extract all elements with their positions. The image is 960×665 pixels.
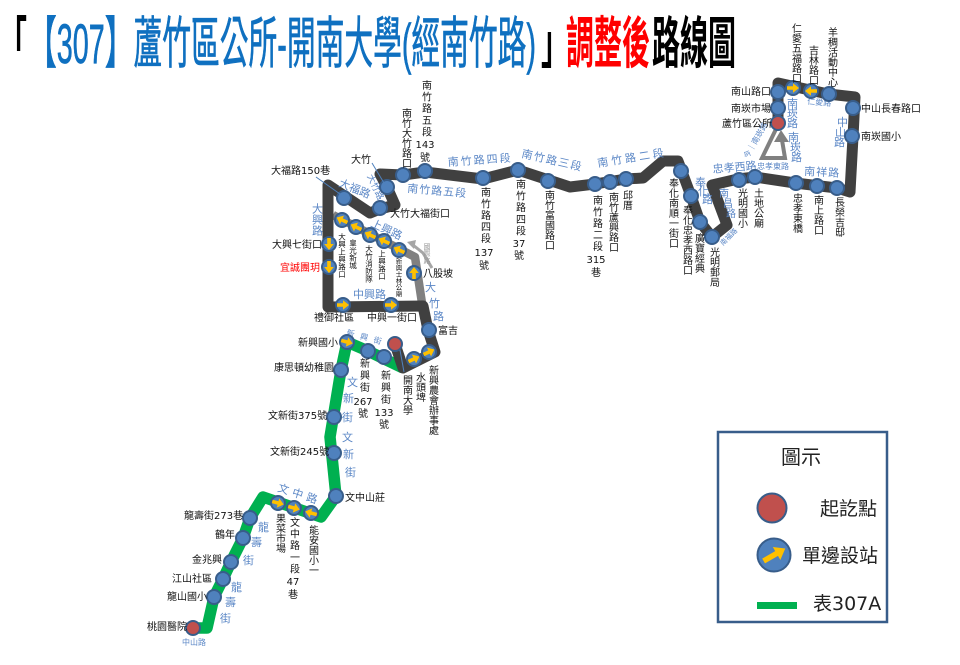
station: 文中路一段47巷: 文中路一段 [288, 516, 300, 576]
road labels: 路 [433, 310, 444, 323]
road labels: 崁 [787, 107, 798, 120]
station: 南上路口 [810, 179, 824, 235]
legend: table 307A line: 表307A [813, 593, 881, 615]
title: 調整後 [566, 12, 650, 75]
station: 文新街375號: 文新街375號 [268, 409, 327, 422]
road labels: 忠孝東路 [757, 161, 789, 171]
station: 南竹富國路口 [541, 174, 555, 250]
arrow: grey loop near Luzhu office [762, 125, 789, 158]
title: 」 [541, 12, 569, 75]
station: 大竹大福街口: 大竹大福街口 [390, 207, 450, 220]
station: 中興一街口 [367, 298, 417, 324]
road labels: 文中路 [276, 481, 323, 508]
station: 南崁市場 [731, 101, 785, 115]
station: 文中路一段47巷: 47 [287, 577, 299, 588]
arrow: small grey one-way arrow [407, 240, 432, 268]
station: 南竹蘆興路口 [603, 175, 618, 252]
station: 龍山國小 [167, 590, 221, 604]
station: 新興街133號 [374, 350, 394, 431]
station: 長榮吉邸 [830, 181, 844, 238]
station: 光明國小 [732, 173, 748, 229]
station: 奉化南順一街口 [666, 164, 688, 248]
road labels: 竹 [429, 296, 440, 310]
road labels: 大福路 [337, 176, 373, 201]
legend heading: 圖示 [781, 445, 821, 469]
station: 文新街375號 [268, 409, 341, 424]
road labels: 南竹路五段 [407, 181, 468, 200]
road labels: 中山路 [182, 637, 206, 647]
station: 南崁市場: 南崁市場 [731, 102, 771, 115]
station: 吉林路口: 吉林路口 [806, 45, 818, 85]
station: 上興路口: 上興路口 [377, 250, 386, 280]
station: 南竹路四段37號: 南竹路四段 [514, 178, 526, 238]
road labels: 文 [347, 375, 358, 389]
road labels: 仁愛路 [807, 96, 832, 108]
road labels: 龍 [231, 580, 242, 594]
station: 新興街133號: 新興街 [378, 369, 390, 406]
station: 富吉: 富吉 [438, 324, 458, 337]
station: 仁愛五福路口: 仁愛五福路口 [790, 23, 802, 83]
road labels: 大 [425, 280, 436, 294]
station: 新興街267號: 267 [353, 397, 373, 408]
station: 大竹: 大竹 [351, 153, 371, 166]
station: 大興七街口 [272, 237, 336, 251]
road labels: 上興路 [369, 217, 404, 243]
route line: grey Shangxing branch [333, 215, 422, 303]
station: 新興街133號: 133 [374, 408, 394, 419]
road labels [182, 96, 848, 647]
station: 南竹路四段137號: 號 [479, 259, 489, 272]
legend: table 307A line [757, 593, 881, 615]
station: 能安國小一 [304, 506, 318, 575]
station: 大興上興路口: 大興上興路口 [337, 232, 346, 278]
station: 邱厝: 邱厝 [620, 189, 632, 211]
station: 邱厝 [619, 172, 633, 211]
station: 長榮吉邸: 長榮吉邸 [832, 197, 844, 238]
station: 新興街267號: 號 [358, 407, 368, 420]
arrow: small grey one-way arrow: 國際路 [423, 243, 431, 265]
station: 鶴年: 鶴年 [215, 528, 235, 541]
station: 南竹路四段137號 [474, 171, 494, 272]
station: 上興路口 [377, 234, 391, 280]
station: 南竹富國路口: 南竹富國路口 [542, 189, 554, 250]
road labels: 大竹路 [364, 172, 387, 202]
station: 南竹路四段37號 [511, 163, 526, 262]
station: 鶴年 [215, 528, 250, 545]
station: 新興士林公廟: 新興士林公廟 [394, 257, 402, 298]
station: 皇光新城: 皇光新城 [348, 238, 358, 270]
station: 開南大學 (terminus): 開南大學 [400, 375, 412, 416]
station: 奉化南順一街口: 奉化南順一街口 [666, 177, 678, 248]
station: 江山社區: 江山社區 [172, 572, 212, 585]
station: 水頭埤: 水頭埤 [414, 372, 426, 403]
station: 南山路口: 南山路口 [731, 85, 771, 98]
station: 富吉 [422, 323, 458, 337]
station: 廣寶經典: 廣寶經典 [692, 232, 704, 274]
station: 吉林路口 [804, 45, 818, 98]
station: 宜誠團玥: 宜誠團玥 [280, 261, 320, 274]
station: 中山長春路口 [846, 101, 921, 115]
station: 新興街267號: 新興街 [358, 357, 370, 394]
station: 南竹路四段37號: 號 [514, 249, 524, 262]
station: 新興國小: 新興國小 [298, 336, 338, 349]
station: 新興士林公廟 [392, 243, 406, 298]
road labels: 南竹路三段 [520, 146, 584, 174]
station: 文中路一段47巷: 巷 [288, 589, 298, 601]
station: 新興街133號: 號 [379, 418, 389, 431]
station: 新興國小 [298, 335, 354, 349]
road labels: 南竹路四段 [447, 150, 513, 169]
station: 禮御社區 [314, 298, 354, 324]
road labels: 路 [787, 117, 798, 130]
road labels: 新 [343, 447, 354, 461]
station: 八股坡 [407, 266, 453, 280]
legend: terminus [758, 494, 877, 522]
station: 土地公廟 [748, 170, 764, 229]
road labels: 今｜南崁路 [741, 120, 770, 160]
station: 南竹路五段143號: 143 [415, 140, 435, 151]
station: 南竹路二段315巷 [586, 177, 606, 279]
station: 文新街245號: 文新街245號 [270, 445, 329, 458]
station: 八股坡: 八股坡 [423, 267, 453, 280]
road labels: 街 [345, 465, 356, 479]
station: 羊稠活動中心: 羊稠活動中心 [826, 26, 838, 87]
station: 龍壽街273巷: 龍壽街273巷 [184, 509, 243, 522]
route line: green 307A [193, 342, 403, 628]
road labels: 路 [726, 207, 736, 220]
road labels: 忠孝西路 [712, 159, 757, 176]
road labels: 街 [220, 611, 231, 625]
station: 南竹路四段37號: 37 [513, 239, 525, 250]
station: 水頭埤 [407, 352, 426, 403]
road labels: 大興路 [310, 202, 324, 237]
station: 南上路口: 南上路口 [812, 194, 824, 235]
road labels: 壽 [225, 595, 236, 609]
station: 禮御社區: 禮御社區 [314, 311, 354, 324]
station: 光明郵局: 光明郵局 [708, 246, 720, 288]
station: 南竹路四段137號: 南竹路四段 [478, 186, 490, 244]
station: 大竹消防隊 [363, 228, 377, 284]
station: 果菜市場 [271, 496, 286, 554]
station: 土地公廟: 土地公廟 [752, 187, 764, 229]
station: 南竹路四段137號: 137 [474, 248, 494, 259]
station: 金兆興: 金兆興 [192, 553, 222, 566]
road labels: 奉 [695, 175, 706, 189]
station: 新興農會辦事處 [422, 345, 438, 436]
station: 南竹路五段143號 [415, 79, 435, 178]
station: 開南大學 (terminus) [388, 337, 412, 416]
station: 能安國小一: 能安國小一 [306, 524, 318, 575]
station: 南竹路二段315巷: 巷 [591, 267, 601, 279]
station: 龍壽街273巷 [184, 509, 257, 525]
station: 桃園醫院 (terminus): 桃園醫院 [147, 620, 187, 633]
road labels: 昌 [723, 198, 733, 210]
station: 羊稠活動中心 [822, 26, 838, 101]
station: 南崁國小: 南崁國小 [861, 130, 901, 143]
road labels: 壽 [251, 535, 262, 549]
station: 蘆竹區公所 (terminus) [722, 116, 785, 130]
road labels: 南 [788, 131, 799, 144]
station: 南竹大竹路口: 南竹大竹路口 [400, 107, 412, 168]
station: 中山長春路口: 中山長春路口 [861, 102, 921, 115]
station: 光明國小: 光明國小 [736, 187, 748, 229]
station: 龍山國小: 龍山國小 [167, 590, 207, 603]
station: 大竹 [351, 153, 394, 194]
legend: one-side stop [758, 538, 878, 572]
road labels: 中 [837, 116, 848, 129]
station: 忠孝東橋: 忠孝東橋 [790, 193, 802, 234]
station: 南山路口 [731, 85, 785, 99]
station: 南竹大竹路口 [396, 107, 412, 182]
road labels: 南 [787, 97, 798, 110]
station: 南竹路二段315巷: 南竹路二段 [590, 194, 602, 252]
road labels: 崁 [790, 141, 801, 154]
station: 文中山莊 [329, 489, 385, 504]
station: 文中山莊: 文中山莊 [345, 491, 385, 504]
station: 康思頓幼稚園: 康思頓幼稚園 [274, 361, 334, 374]
road labels: 南祥路 [804, 164, 841, 180]
station: 蘆竹區公所 (terminus): 蘆竹區公所 [722, 117, 772, 130]
road labels: 南竹路二段 [596, 145, 668, 170]
route line: main dark route [328, 83, 855, 368]
road labels: 街 [342, 410, 353, 424]
station: 新興街267號 [353, 344, 375, 420]
station: 新興農會辦事處: 新興農會辦事處 [426, 364, 438, 436]
station: 文新街245號 [270, 445, 341, 460]
road labels: 街 [243, 553, 254, 567]
station: 大興七街口: 大興七街口 [272, 238, 322, 251]
road labels: 新 [343, 391, 354, 405]
station: 大竹大福街口 [373, 201, 450, 220]
station: 大興上興路口 [335, 213, 349, 278]
station: 康思頓幼稚園 [274, 361, 348, 377]
station: 金兆興 [192, 553, 238, 569]
station: 中興一街口: 中興一街口 [367, 311, 417, 324]
station: 大福路150巷 [271, 164, 351, 205]
road labels: 路 [791, 151, 802, 164]
station: 果菜市場: 果菜市場 [274, 513, 286, 554]
station: 光明郵局 [705, 230, 720, 288]
road labels: 南福路 [718, 226, 739, 247]
title: 路線圖 [652, 12, 736, 75]
station: 南竹蘆興路口: 南竹蘆興路口 [606, 191, 618, 252]
station: 仁愛五福路口 [786, 23, 802, 95]
road labels: 龍 [258, 520, 269, 534]
road labels: 新興街 [345, 327, 389, 348]
station: 江山社區 [172, 572, 230, 586]
legend: one-side stop: 單邊設站 [802, 545, 878, 567]
station: 文中路一段47巷 [287, 501, 301, 601]
station: 南竹路五段143號: 南竹路五段 [420, 79, 432, 138]
station: 大竹消防隊: 大竹消防隊 [364, 244, 374, 284]
station: 南竹路二段315巷: 315 [586, 255, 606, 266]
road labels: 路 [834, 136, 845, 149]
road labels: 路 [702, 193, 713, 206]
road labels: 文 [342, 430, 353, 444]
title: 「 [0, 12, 27, 75]
station: 桃園醫院 (terminus) [147, 620, 200, 635]
station: 皇光新城 [348, 220, 363, 270]
station: 南崁國小 [845, 129, 901, 143]
station: 忠孝東橋 [789, 176, 803, 234]
station: 宜誠團玥 [280, 260, 336, 274]
road labels: 中興路 [353, 288, 386, 301]
road labels: 南 [719, 187, 729, 200]
station: 南竹路五段143號: 號 [420, 151, 430, 164]
legend: terminus: 起訖點 [820, 498, 877, 520]
station: 奉化忠孝西路口 [680, 189, 698, 275]
station: 廣寶經典 [692, 215, 707, 274]
road labels: 化 [698, 185, 709, 198]
road labels: 山 [835, 126, 846, 139]
station: 大福路150巷: 大福路150巷 [271, 164, 330, 177]
panel: legend [718, 432, 887, 622]
station: 奉化忠孝西路口: 奉化忠孝西路口 [680, 204, 692, 275]
